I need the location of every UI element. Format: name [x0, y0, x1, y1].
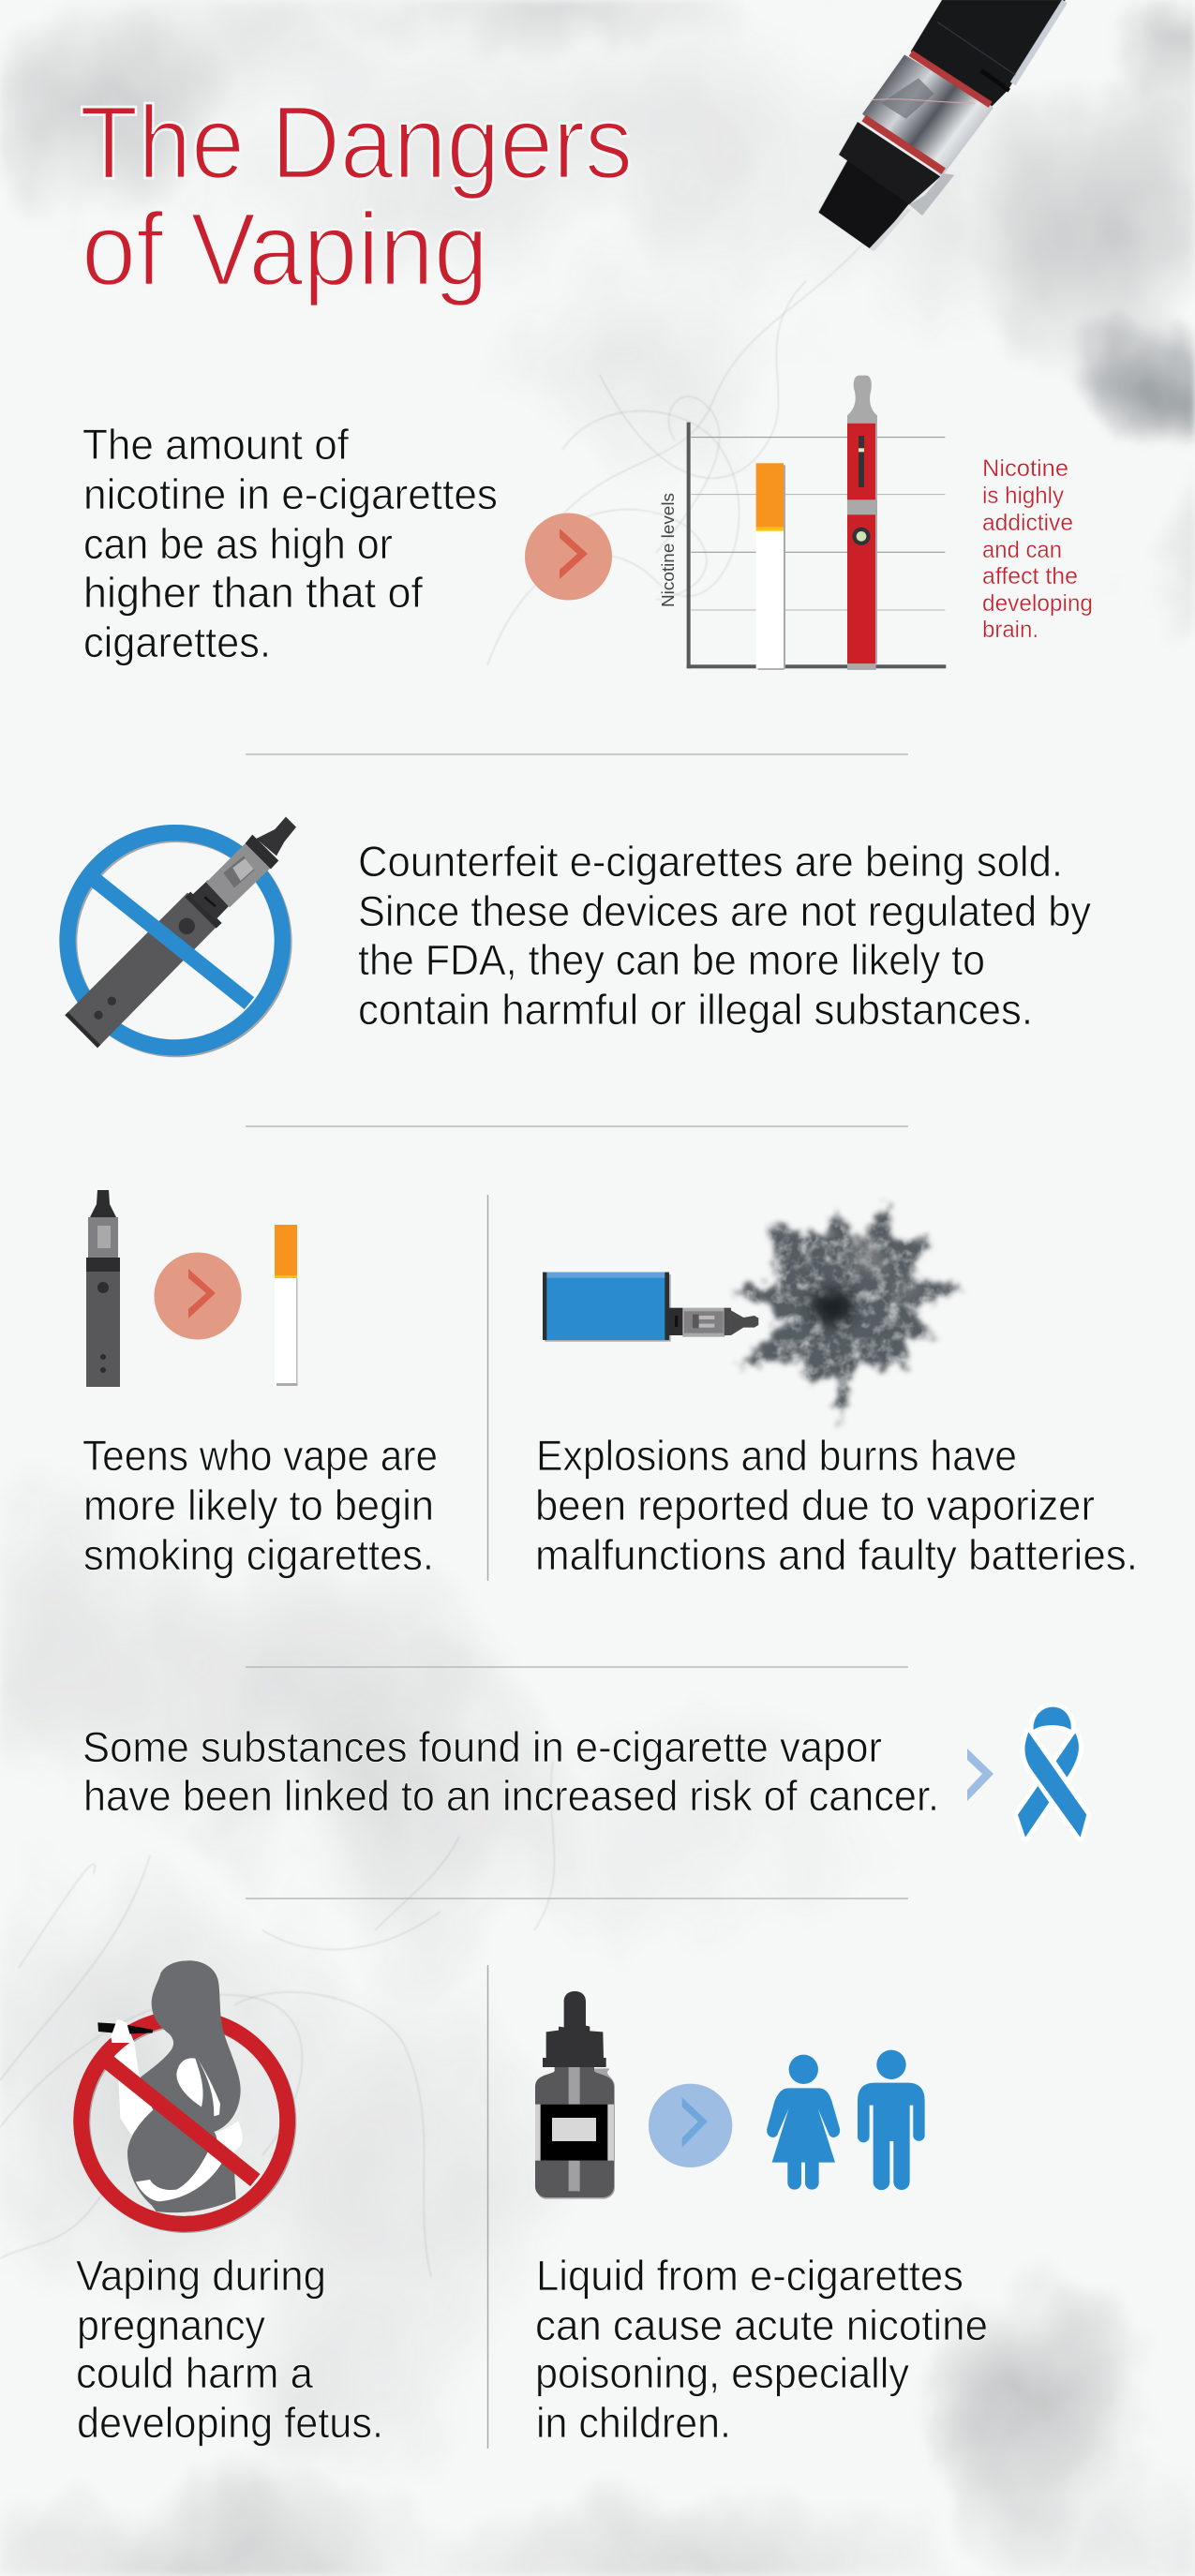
chart: nicotine levels — [687, 376, 946, 670]
text: teens: Teens who vape are — [82, 1432, 438, 1480]
text: counterfeit e-cigarettes: Counterfeit e-cigarettes are being sold. — [358, 838, 1063, 886]
callout: nicotine is addictive: brain. — [982, 617, 1038, 643]
text: pregnancy — [76, 2252, 383, 2447]
callout: nicotine is addictive: is highly — [982, 483, 1064, 509]
text: cancer risk: have been linked to an increased risk of cancer. — [83, 1772, 939, 1820]
text: counterfeit e-cigarettes: contain harmful or illegal substances. — [358, 986, 1033, 1034]
title — [80, 85, 633, 307]
text: nicotine amount: The amount of — [82, 421, 349, 469]
text: nicotine amount: higher than that of — [83, 569, 423, 617]
text: liquid poisoning: can cause acute nicotine — [535, 2301, 988, 2349]
callout: nicotine is addictive: developing — [982, 590, 1093, 617]
explosion — [728, 1201, 963, 1424]
callout: nicotine is addictive: Nicotine — [982, 455, 1068, 482]
bottle — [535, 1991, 615, 2199]
e-cigarette bar — [847, 376, 877, 670]
text: teens: more likely to begin — [83, 1482, 434, 1529]
text: teens: smoking cigarettes. — [83, 1531, 434, 1579]
callout: nicotine is addictive: and can — [982, 537, 1062, 563]
photo: vape device — [818, 0, 1066, 251]
icon: vape to cigarette — [86, 1190, 298, 1387]
man figure — [858, 2050, 925, 2190]
text: nicotine amount: nicotine in e-cigarettes — [83, 470, 498, 518]
text: liquid poisoning: Liquid from e-cigarettes — [536, 2252, 963, 2300]
text: counterfeit e-cigarettes — [358, 838, 1091, 1034]
icon: prohibited vape — [65, 817, 296, 1050]
cigarette bar — [756, 463, 785, 670]
arrow — [649, 2084, 732, 2167]
text: pregnancy: developing fetus. — [77, 2399, 383, 2447]
atomizer — [669, 1308, 758, 1337]
text: explosions — [535, 1432, 1138, 1579]
text: counterfeit e-cigarettes: the FDA, they can be more likely to — [358, 936, 985, 984]
text: pregnancy: pregnancy — [77, 2301, 265, 2349]
text: liquid poisoning: in children. — [536, 2399, 731, 2447]
woman figure — [767, 2055, 840, 2190]
callout: nicotine is addictive: affect the — [982, 563, 1078, 589]
text: pregnancy: Vaping during — [76, 2252, 326, 2300]
woman silhouette — [97, 1960, 243, 2212]
text: explosions: malfunctions and faulty batteries. — [535, 1531, 1138, 1579]
cigarette — [275, 1225, 298, 1386]
callout: nicotine is addictive: addictive — [982, 510, 1073, 536]
chart axis label: Nicotine levels — [659, 493, 678, 607]
text: explosions: Explosions and burns have — [536, 1432, 1017, 1480]
text: explosions: been reported due to vaporizer — [535, 1482, 1095, 1529]
text: pregnancy: could harm a — [76, 2349, 314, 2397]
text: cancer risk — [82, 1723, 939, 1820]
text: teens — [82, 1432, 438, 1579]
text: cancer risk: Some substances found in e-cigarette vapor — [82, 1723, 882, 1771]
text: counterfeit e-cigarettes: Since these devices are not regulated by — [358, 887, 1091, 935]
text: nicotine amount — [82, 421, 498, 666]
text: nicotine amount: cigarettes. — [83, 618, 271, 666]
title: of Vaping — [82, 192, 488, 307]
icon: cancer ribbon — [1018, 1707, 1086, 1838]
arrow — [154, 1252, 242, 1340]
text: liquid poisoning: poisoning, especially — [535, 2349, 909, 2397]
vape — [86, 1190, 120, 1387]
icon: liquid bottle to people — [535, 1991, 925, 2199]
arrow: nicotine to chart — [525, 514, 612, 600]
text: nicotine amount: can be as high or — [83, 520, 393, 568]
battery — [543, 1273, 671, 1342]
icon: pregnant woman prohibited — [82, 1960, 289, 2226]
text: liquid poisoning — [535, 2252, 988, 2447]
icon: exploding vaporizer — [543, 1201, 963, 1424]
title: The Dangers — [80, 85, 633, 201]
arrow: cancer — [967, 1749, 993, 1801]
callout: nicotine is addictive — [982, 455, 1093, 643]
